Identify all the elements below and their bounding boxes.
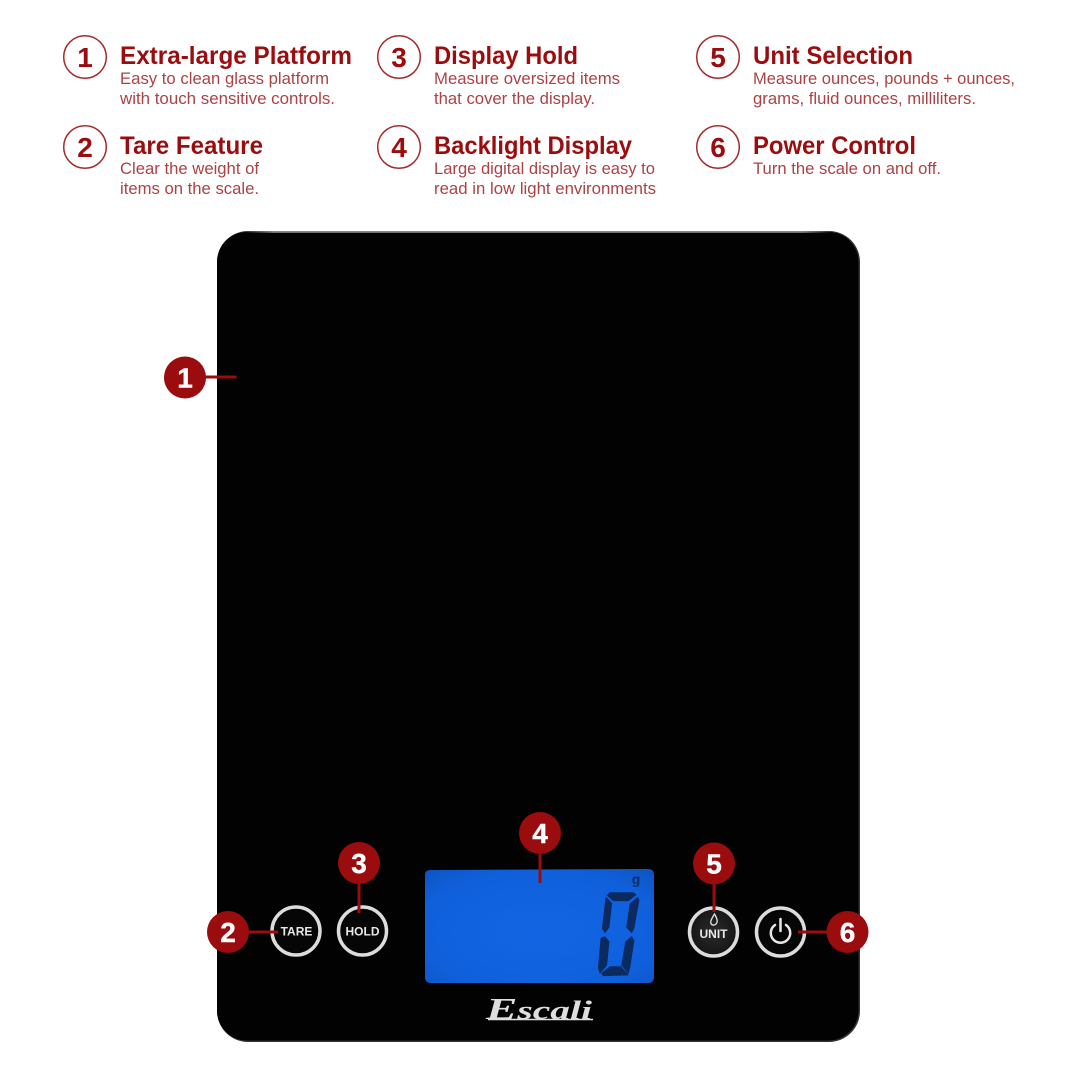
legend item 5: unit selection: Measure ounces, pounds + ounces, [753,70,1015,88]
callout 3: hold: 3 [351,848,367,879]
button: power [756,908,804,956]
legend item 4: backlight display: Backlight Display [434,132,632,160]
callout 2: tare [207,911,278,953]
callout 1: platform [164,356,236,398]
scale body [217,231,860,1042]
legend item 5: unit selection: Unit Selection [753,42,913,70]
legend item 4: backlight display: 4 [391,132,407,163]
legend item 5: unit selection [697,36,1015,108]
legend item 3: display hold [378,36,620,108]
legend item 5: unit selection: 5 [710,42,726,73]
legend item 1: extra-large platform: Extra-large Platform [120,42,352,70]
legend item 2: tare feature [64,126,263,198]
button: unit [690,908,738,956]
legend item 4: backlight display: Large digital display is easy to [434,160,655,178]
icon: power symbol [771,919,790,943]
legend item 3: display hold: Display Hold [434,42,578,70]
legend item 3: display hold: 3 [391,42,407,73]
callout 6: power: 6 [840,917,855,948]
legend item 1: extra-large platform: with touch sensitive controls. [119,90,335,108]
legend item 1: extra-large platform: Easy to clean glass platform [120,70,329,88]
legend item 2: tare feature: Clear the weight of [120,160,259,178]
legend item 6: power control: 6 [710,132,726,163]
legend item 3: display hold: that cover the display. [434,90,595,108]
callout 4: display: 4 [532,818,548,849]
legend item 1: extra-large platform [64,36,352,108]
callout 5: unit: 5 [706,848,722,880]
button: tare [272,907,320,955]
callout 3: hold [338,842,380,913]
legend item 2: tare feature: 2 [77,132,93,163]
legend item 5: unit selection: grams, fluid ounces, milliliters. [753,90,976,108]
legend item 6: power control [697,126,941,178]
button: unit: UNIT [700,927,728,941]
brand logo: Escali: E scali [484,991,593,1026]
legend item 4: backlight display: read in low light environments [434,180,656,198]
callout 6: power [798,911,868,953]
button: hold: HOLD [346,924,380,938]
legend item 6: power control: Turn the scale on and off. [753,160,941,178]
legend item 1: extra-large platform: 1 [77,42,93,73]
callout 2: tare: 2 [220,917,236,948]
legend item 2: tare feature: Tare Feature [120,132,263,160]
callout 1: platform: 1 [177,362,193,394]
legend item 4: backlight display [378,126,656,198]
unit label g: g [632,871,640,887]
callout 5: unit [693,842,735,912]
legend item 6: power control: Power Control [753,132,916,160]
icon: drop [711,914,717,925]
legend item 2: tare feature: items on the scale. [120,180,259,198]
LCD display [425,869,654,983]
LCD digit zero [598,893,639,976]
legend item 3: display hold: Measure oversized items [434,70,620,88]
button: tare: TARE [281,924,312,938]
callout 4: display [519,812,561,883]
button: hold [338,907,386,955]
